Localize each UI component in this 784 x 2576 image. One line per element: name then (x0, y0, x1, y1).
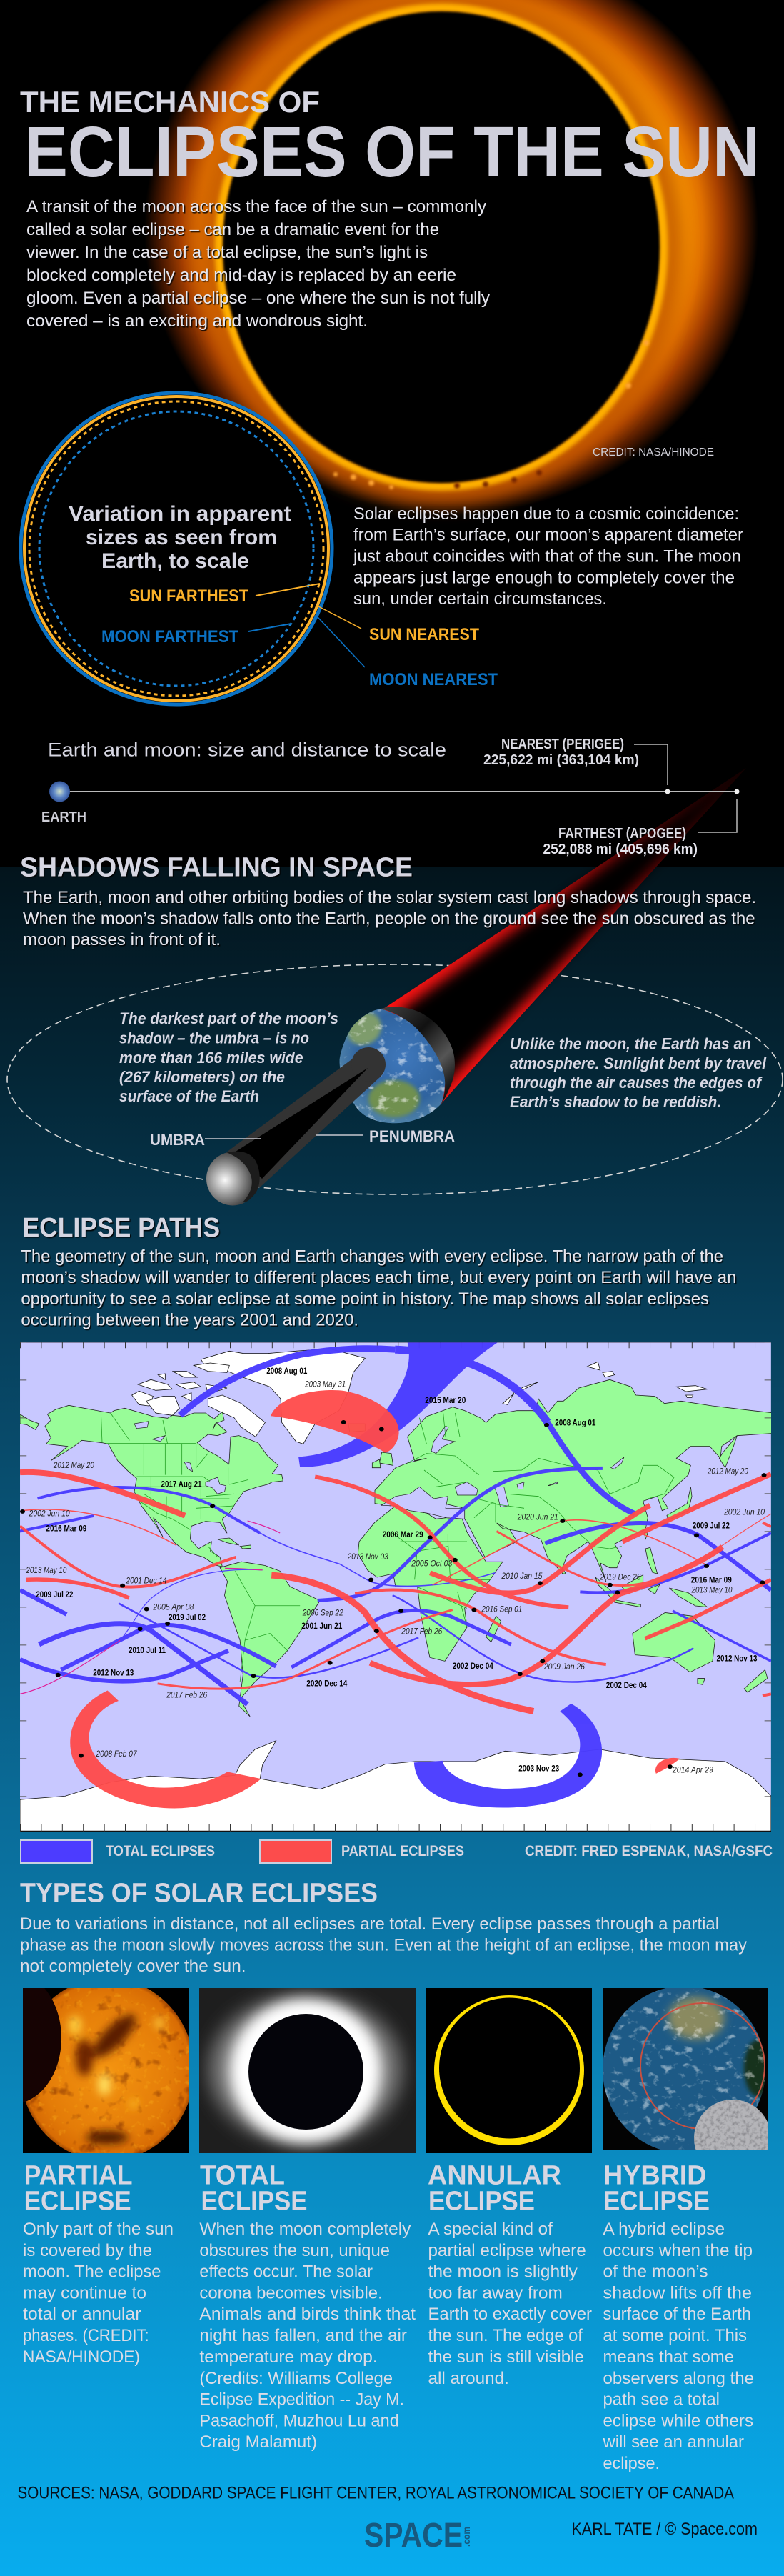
map date labels: 2008 Aug 01 (555, 1418, 596, 1428)
heading: ECLIPSE (24, 2187, 131, 2217)
types text: phase as the moon slowly moves across the sun. Even at the height of an eclipse, the moon may (20, 1936, 747, 1955)
description: occurs when the tip (603, 2241, 753, 2260)
description: A special kind of (428, 2220, 553, 2239)
intro text (26, 197, 490, 331)
umbra note: more than 166 miles wide (119, 1049, 303, 1067)
icon: small earth (49, 782, 70, 802)
apogee label: FARTHEST (APOGEE) (558, 826, 686, 842)
apogee label: 252,088 mi (405,696 km) (543, 842, 698, 857)
map date labels: 2009 Jul 22 (36, 1589, 74, 1599)
description: Only part of the sun (23, 2220, 174, 2239)
intro text: gloom. Even a partial eclipse – one where the sun is not fully (26, 289, 490, 308)
map date labels: 2006 Mar 29 (383, 1529, 423, 1539)
description: A hybrid eclipse (603, 2220, 725, 2239)
eclipse paths text: moon’s shadow will wander to different places each time, but every point on Earth will have an (21, 1268, 736, 1287)
description: night has fallen, and the air (199, 2326, 407, 2345)
description: Earth to exactly cover (428, 2305, 592, 2324)
description: moon. The eclipse (23, 2262, 161, 2282)
map date labels: 2019 Dec 26 (600, 1572, 641, 1582)
label: moon nearest (318, 617, 498, 689)
intro text: viewer. In the case of a total eclipse, the sun’s light is (26, 243, 428, 262)
shadows text: When the moon’s shadow falls onto the Earth, people on the ground see the sun obscured as the (23, 909, 755, 929)
perigee label: NEAREST (PERIGEE) (501, 737, 624, 752)
map date labels: 2017 Feb 26 (166, 1690, 207, 1700)
heading (428, 2160, 561, 2217)
map date labels: 2016 Mar 09 (46, 1523, 87, 1533)
shadows text: moon passes in front of it. (23, 930, 221, 949)
heading: ECLIPSE (603, 2187, 710, 2217)
intro text: covered – is an exciting and wondrous sight. (26, 311, 368, 331)
description: means that some (603, 2347, 734, 2367)
eclipse paths heading: ECLIPSE PATHS (23, 1213, 220, 1243)
map date labels: 2002 Dec 04 (606, 1680, 647, 1690)
total eclipse paths (20, 1342, 771, 1808)
map date labels: 2012 May 20 (707, 1467, 748, 1477)
description: When the moon completely (199, 2220, 411, 2239)
eurasia and africa land (358, 1362, 774, 1661)
description: will see an annular (603, 2432, 744, 2452)
southern land and ocean (20, 1342, 771, 1832)
map date labels: 2005 Apr 08 (152, 1602, 194, 1612)
perigee label: 225,622 mi (363,104 km) (483, 752, 639, 768)
description: is covered by the (23, 2241, 152, 2260)
map date labels: 2008 Feb 07 (96, 1749, 138, 1759)
label: moon nearest: MOON NEAREST (369, 670, 498, 689)
map date labels: 2002 Dec 04 (453, 1661, 493, 1671)
map date labels (26, 1366, 765, 1774)
description: of the moon’s (603, 2262, 708, 2282)
description: all around. (428, 2369, 509, 2388)
description: the sun. The edge of (428, 2326, 583, 2345)
heading: PARTIAL (24, 2160, 133, 2190)
penumbra (226, 1047, 386, 1188)
map date labels: 2003 May 31 (304, 1379, 346, 1389)
diagram title: sizes as seen from (86, 526, 277, 549)
title: THE MECHANICS OF (20, 85, 320, 119)
night side crescent (381, 1007, 455, 1104)
description: observers along the (603, 2369, 754, 2388)
description: corona becomes visible. (199, 2283, 383, 2303)
description: partial eclipse where (428, 2241, 586, 2260)
map date labels: 2017 Aug 21 (161, 1479, 202, 1489)
description: Pasachoff, Muzhou Lu and (199, 2412, 399, 2430)
map date labels: 2010 Jul 11 (129, 1645, 166, 1655)
description: surface of the Earth (603, 2305, 751, 2324)
heading: HYBRID (603, 2160, 707, 2190)
label: sun nearest: SUN NEAREST (369, 625, 479, 644)
description: shadow lifts off the (603, 2283, 752, 2303)
map date labels: 2013 May 10 (26, 1565, 67, 1575)
map date labels: 2012 Nov 13 (93, 1668, 134, 1678)
umbra note: shadow – the umbra – is no (119, 1029, 309, 1047)
atmosphere note: Unlike the moon, the Earth has an (510, 1035, 751, 1053)
distance line (60, 744, 740, 832)
eclipse bands (20, 1342, 771, 1832)
map date labels: 2013 Nov 03 (347, 1552, 388, 1562)
umbra note: surface of the Earth (119, 1087, 259, 1105)
intro text: A transit of the moon across the face of the sun – commonly (26, 197, 486, 216)
perigee label (483, 737, 639, 768)
greatest eclipse markers (20, 1420, 767, 1777)
map date labels: 2008 Aug 01 (266, 1366, 308, 1376)
umbra (236, 1068, 368, 1179)
atmosphere note (510, 1035, 767, 1111)
description (428, 2220, 592, 2388)
eclipse paths text: occurring between the years 2001 and 2020. (21, 1311, 358, 1330)
description: Craig Malamut) (199, 2432, 317, 2452)
atmosphere note: atmosphere. Sunlight bent by travel (510, 1054, 767, 1072)
description: eclipse while others (603, 2412, 753, 2430)
diagram title (69, 502, 291, 573)
map legend (21, 1840, 773, 1863)
earth-moon distance scale (41, 737, 740, 857)
space.com logo: .com (461, 2527, 472, 2547)
photo: annular eclipse (426, 1988, 592, 2153)
legend: total eclipses: TOTAL ECLIPSES (106, 1843, 215, 1859)
icon: moon (206, 1152, 260, 1206)
total eclipse column (199, 2160, 416, 2452)
description: the sun is still visible (428, 2347, 584, 2367)
photo: total eclipse (199, 1988, 416, 2153)
description: (Credits: Williams College (199, 2369, 393, 2388)
umbra note (119, 1009, 338, 1105)
apogee label (543, 826, 698, 857)
map date labels: 2009 Jan 26 (543, 1662, 585, 1672)
label: sun farthest (129, 584, 320, 606)
thin magenta path (20, 1521, 280, 1694)
description: at some point. This (603, 2326, 747, 2345)
atmosphere note: Earth’s shadow to be reddish. (510, 1093, 721, 1111)
photo: hybrid eclipse (603, 1988, 768, 2150)
heading: ECLIPSE (428, 2187, 535, 2217)
types text (20, 1914, 747, 1976)
diagram title: Earth, to scale (101, 549, 249, 573)
photo credit: CREDIT: NASA/HINODE (593, 446, 714, 459)
world map of eclipse paths (20, 1342, 774, 1832)
partial eclipse column (23, 2160, 174, 2367)
types heading: TYPES OF SOLAR ECLIPSES (20, 1879, 378, 1909)
eclipse paths text: The geometry of the sun, moon and Earth changes with every eclipse. The narrow path of the (21, 1247, 723, 1267)
description: too far away from (428, 2283, 563, 2303)
description (199, 2220, 416, 2452)
map date labels: 2017 Feb 26 (401, 1626, 443, 1636)
label: sun nearest (318, 606, 479, 644)
legend: partial eclipses: PARTIAL ECLIPSES (341, 1843, 464, 1859)
map artwork (20, 1342, 774, 1832)
heading: TOTAL (200, 2160, 285, 2190)
heading: ECLIPSE (201, 2187, 307, 2217)
earth label: EARTH (41, 809, 86, 825)
moon orbit dashed ellipse (7, 964, 783, 1194)
description: phases. (CREDIT: (23, 2326, 149, 2345)
coincidence text: appears just large enough to completely cover the (353, 569, 735, 587)
description: obscures the sun, unique (199, 2241, 390, 2260)
map date labels: 2009 Jul 22 (693, 1521, 730, 1531)
map date labels: 2003 Nov 23 (518, 1763, 559, 1773)
partial eclipse paths (20, 1390, 771, 1808)
sun nearest ring (24, 396, 328, 701)
penumbra label: PENUMBRA (369, 1127, 455, 1145)
scale heading: Earth and moon: size and distance to scale (48, 739, 446, 761)
map date labels: 2002 Jun 10 (723, 1507, 765, 1517)
annular eclipse photo (144, 0, 758, 514)
description: may continue to (23, 2283, 146, 2303)
map date labels: 2016 Sep 01 (481, 1604, 522, 1614)
intro text: called a solar eclipse – can be a dramatic event for the (26, 220, 439, 239)
coincidence text: sun, under certain circumstances. (353, 589, 607, 609)
photo: partial eclipse (23, 1988, 189, 2153)
description: NASA/HINODE) (23, 2347, 140, 2367)
red earth shadow (383, 768, 746, 1104)
map date labels: 2012 Nov 13 (717, 1653, 758, 1663)
annular eclipse column (428, 2160, 592, 2388)
description (23, 2220, 174, 2367)
description: total or annular (23, 2305, 141, 2324)
shadows text: The Earth, moon and other orbiting bodies of the solar system cast long shadows through space. (23, 888, 756, 907)
types text: not completely cover the sun. (20, 1957, 246, 1976)
diagram title: Variation in apparent (69, 502, 291, 526)
map date labels: 2019 Jul 02 (169, 1612, 206, 1622)
map date labels: 2001 Jun 21 (301, 1621, 343, 1631)
apparent size diagram (21, 393, 498, 704)
heading: ANNULAR (428, 2160, 561, 2190)
earth with shadow (336, 1004, 455, 1129)
intro text: blocked completely and mid-day is replaced by an eerie (26, 266, 456, 285)
moon nearest ring (21, 393, 332, 704)
sun farthest ring (29, 401, 323, 696)
umbra label: UMBRA (150, 1131, 205, 1149)
legend: partial eclipses (260, 1840, 464, 1863)
eclipse paths text (21, 1247, 736, 1330)
map date labels: 2015 Mar 20 (425, 1395, 466, 1405)
hybrid eclipse column (603, 2160, 754, 2473)
north america and arctic land (20, 1349, 393, 1567)
map date labels: 2013 May 10 (691, 1584, 733, 1594)
shadows text (23, 888, 756, 949)
description: effects occur. The solar (199, 2262, 373, 2282)
map date labels: 2010 Jan 15 (501, 1571, 543, 1581)
moon shadow cone (226, 1047, 386, 1188)
umbra note: (267 kilometers) on the (119, 1068, 285, 1086)
types text: Due to variations in distance, not all eclipses are total. Every eclipse passes through a partial (20, 1914, 719, 1934)
map date labels: 2014 Apr 29 (672, 1764, 713, 1774)
atmosphere note: through the air causes the edges of (510, 1074, 763, 1092)
umbra note: The darkest part of the moon’s (119, 1009, 338, 1027)
heading (24, 2160, 133, 2217)
coincidence text: from Earth’s surface, our moon’s apparent diameter (353, 526, 743, 544)
description (603, 2220, 754, 2473)
description: Animals and birds think that (199, 2305, 416, 2324)
map date labels: 2006 Sep 22 (302, 1607, 343, 1617)
map date labels: 2012 May 20 (53, 1460, 94, 1470)
eclipse paths text: opportunity to see a solar eclipse at some point in history. The map shows all solar eclipses (21, 1289, 709, 1309)
coincidence text: Solar eclipses happen due to a cosmic coincidence: (353, 504, 739, 524)
label: moon farthest (101, 624, 291, 647)
legend: total eclipses (21, 1840, 215, 1863)
heading (200, 2160, 307, 2217)
description: eclipse. (603, 2454, 660, 2473)
label: sun farthest: SUN FARTHEST (129, 586, 248, 606)
description: temperature may drop. (199, 2347, 378, 2367)
map date labels: 2020 Jun 21 (517, 1512, 558, 1522)
map date labels: 2001 Dec 14 (126, 1576, 167, 1586)
map date labels: 2005 Oct 03 (411, 1559, 453, 1569)
coincidence text: just about coincides with that of the sun. The moon (353, 547, 741, 566)
description: the moon is slightly (428, 2262, 578, 2282)
coincidence text (353, 504, 743, 609)
label: moon farthest: MOON FARTHEST (101, 627, 238, 647)
moon farthest ring (39, 411, 313, 686)
map date labels: 2002 Jun 10 (29, 1509, 70, 1519)
description: Eclipse Expedition -- Jay M. (199, 2390, 404, 2409)
byline: KARL TATE / © Space.com (571, 2520, 758, 2539)
icon: earth (340, 1009, 446, 1123)
heading (603, 2160, 710, 2217)
description: path see a total (603, 2390, 720, 2409)
map date labels: 2020 Dec 14 (306, 1679, 348, 1689)
space.com logo: SPACE (364, 2517, 463, 2555)
shadows heading: SHADOWS FALLING IN SPACE (20, 853, 413, 883)
map date labels: 2016 Mar 09 (691, 1574, 732, 1584)
